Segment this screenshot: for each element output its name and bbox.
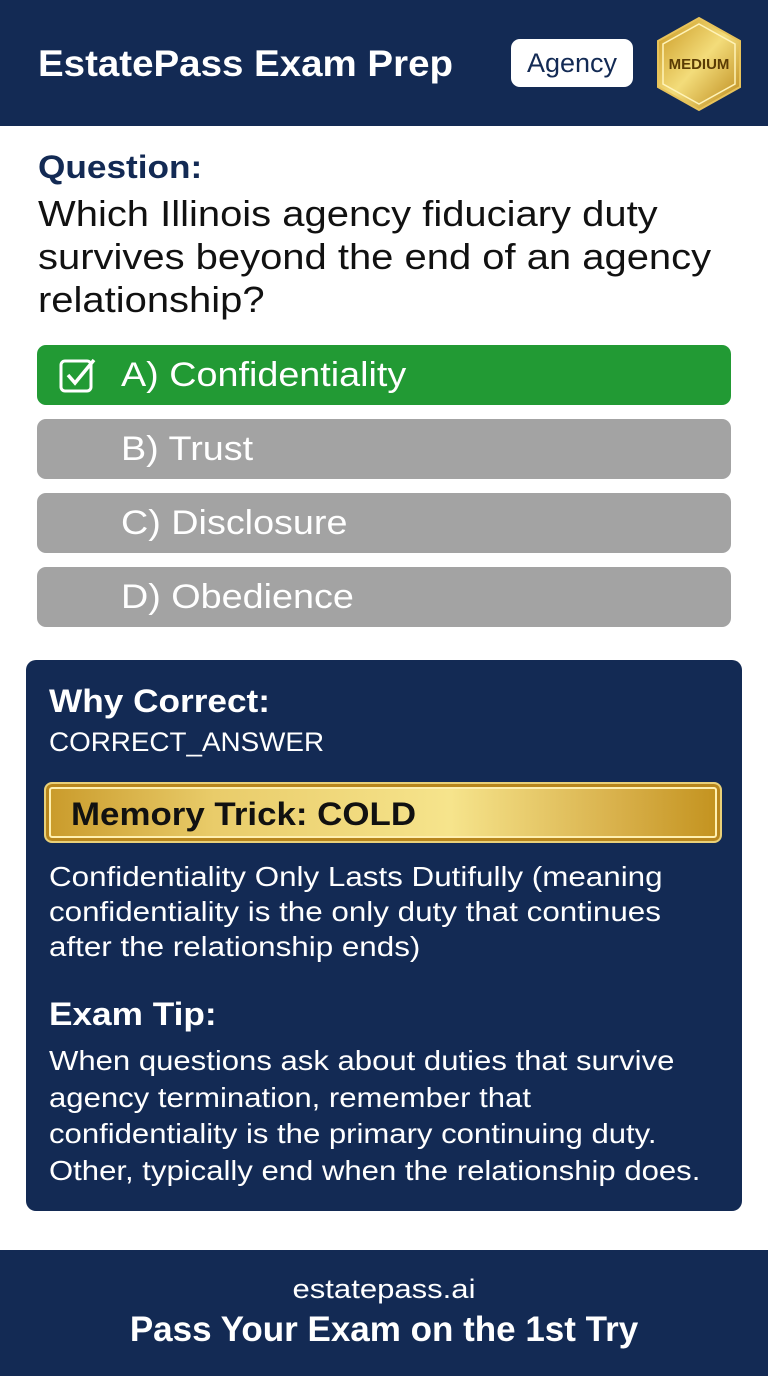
exam tip text: agency termination, remember that	[49, 1082, 531, 1112]
exam tip text: When questions ask about duties that survive	[49, 1045, 674, 1076]
option A correct: A) Confidentiality	[121, 356, 406, 394]
correct answer text: CORRECT_ANSWER	[49, 727, 324, 757]
exam tip text: confidentiality is the primary continuing duty.	[49, 1118, 657, 1149]
memory trick text	[49, 861, 663, 962]
memory trick bar: Memory Trick: COLD	[71, 796, 416, 832]
question text	[38, 193, 711, 320]
footer tagline: Pass Your Exam on the 1st Try	[130, 1310, 638, 1349]
option D: D) Obedience	[121, 578, 354, 616]
category badge: Agency	[527, 48, 617, 78]
memory trick text: Confidentiality Only Lasts Dutifully (meaning	[49, 861, 663, 892]
option C: C) Disclosure	[121, 504, 347, 542]
exam tip text: Other, typically end when the relationship does.	[49, 1154, 700, 1186]
why correct heading: Why Correct:	[49, 683, 270, 719]
option C	[37, 493, 731, 553]
difficulty hexagon badge: MEDIUM	[669, 56, 729, 73]
option A correct	[37, 345, 731, 405]
footer url: estatepass.ai	[293, 1274, 475, 1304]
memory trick text: confidentiality is the only duty that continues	[49, 896, 661, 927]
memory trick bar	[44, 782, 722, 843]
question text: survives beyond the end of an agency	[38, 236, 711, 277]
difficulty hexagon badge	[657, 16, 741, 112]
option B: B) Trust	[121, 430, 253, 468]
option B	[37, 419, 731, 479]
category badge	[511, 39, 633, 87]
exam tip text	[49, 1045, 700, 1186]
icon: check box	[60, 358, 96, 392]
header bar	[0, 0, 768, 126]
memory trick text: after the relationship ends)	[49, 931, 420, 962]
option D	[37, 567, 731, 627]
title: EstatePass Exam Prep	[38, 43, 453, 84]
panel: explanation	[26, 660, 742, 1211]
exam tip heading: Exam Tip:	[49, 996, 217, 1032]
footer	[0, 1250, 768, 1376]
question text: Which Illinois agency fiduciary duty	[38, 193, 658, 234]
question label: Question:	[38, 149, 202, 185]
question text: relationship?	[38, 279, 265, 320]
